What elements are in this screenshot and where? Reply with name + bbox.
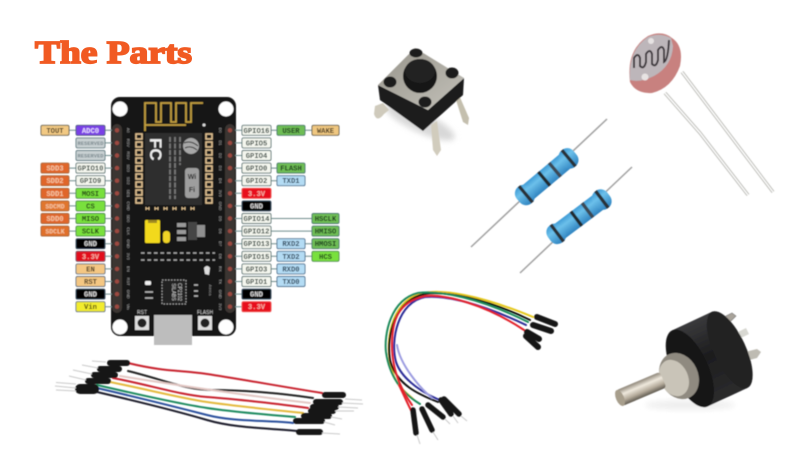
NodeMCU board: FC bbox=[146, 138, 165, 161]
right pin labels: GPIO2 bbox=[246, 178, 267, 186]
right pin labels: HMISO bbox=[315, 229, 337, 237]
left pin labels: SDD1 bbox=[46, 191, 64, 199]
icon: curved jumper wires bbox=[386, 292, 555, 444]
right pin labels: TXD0 bbox=[282, 279, 300, 287]
left pin header bbox=[112, 124, 122, 313]
right pin labels: GPIO15 bbox=[244, 254, 269, 262]
right pin labels bbox=[242, 125, 339, 312]
right silkscreen pin names: D3 bbox=[218, 166, 223, 171]
USB serial chip: CP2102 bbox=[176, 283, 182, 301]
left silkscreen pin names: A0 bbox=[126, 128, 131, 134]
left silkscreen pin names: 3V3 bbox=[126, 253, 131, 261]
RST button bbox=[135, 310, 149, 330]
right silkscreen pin names: GND bbox=[218, 290, 223, 299]
left pin labels: RST bbox=[84, 279, 98, 287]
right silkscreen pin names: D7 bbox=[218, 241, 223, 247]
icon: resistors bbox=[471, 119, 632, 273]
left pin labels: GND bbox=[84, 292, 98, 300]
left silkscreen pin names: CLK bbox=[126, 227, 131, 235]
right silkscreen pin names: D6 bbox=[218, 229, 223, 234]
right pin labels: HMOSI bbox=[315, 241, 336, 249]
right pin labels: GPIO13 bbox=[244, 241, 269, 249]
FLASH button bbox=[197, 310, 213, 330]
left pin labels: SDCLK bbox=[45, 229, 65, 236]
right silkscreen pin names bbox=[218, 128, 223, 311]
left silkscreen pin names: RST bbox=[126, 278, 131, 286]
right pin labels: GPIO4 bbox=[246, 153, 268, 161]
FLASH button: FLASH bbox=[197, 310, 213, 316]
right pin labels: HCS bbox=[319, 254, 333, 262]
left pin labels: 3.3V bbox=[82, 254, 100, 262]
icon: tactile push button bbox=[374, 48, 469, 156]
right pin labels: GPIO14 bbox=[244, 216, 270, 224]
icon: straight jumper wires bbox=[55, 361, 363, 434]
right silkscreen pin names: D2 bbox=[218, 153, 223, 159]
left pin labels: SDCMD bbox=[45, 203, 65, 210]
right pin labels: GPIO3 bbox=[246, 266, 267, 274]
title: The Parts bbox=[35, 34, 192, 70]
right pin labels: GPIO0 bbox=[246, 166, 267, 174]
left pin labels: SDD0 bbox=[46, 216, 64, 224]
right pin header bbox=[225, 124, 235, 313]
right pin labels: FLASH bbox=[280, 166, 302, 174]
left pin labels: GPIO9 bbox=[80, 178, 101, 186]
RST button: RST bbox=[137, 310, 147, 316]
left pin labels: SCLK bbox=[82, 229, 100, 237]
left pin labels: SDD2 bbox=[46, 178, 64, 186]
left pin labels: TOUT bbox=[46, 128, 64, 136]
left pin labels: EN bbox=[86, 266, 95, 274]
NodeMCU board: Amica bbox=[208, 284, 213, 296]
right pin labels: WAKE bbox=[317, 128, 335, 136]
left silkscreen pin names: SD2 bbox=[126, 177, 131, 185]
left silkscreen pin names: EN bbox=[126, 266, 131, 272]
left pin labels: SDD3 bbox=[46, 166, 64, 174]
left silkscreen pin names bbox=[126, 128, 131, 310]
right pin labels: GND bbox=[250, 292, 264, 300]
left pin labels: RESERVED bbox=[78, 154, 104, 160]
metal nut and bushing bbox=[652, 346, 706, 406]
right pin labels: GND bbox=[250, 203, 264, 211]
left pin labels: MISO bbox=[82, 216, 100, 224]
right pin labels: RXD2 bbox=[282, 241, 300, 249]
right silkscreen pin names: D0 bbox=[218, 128, 223, 134]
left silkscreen pin names: SD1 bbox=[126, 189, 131, 198]
USB serial chip bbox=[162, 280, 186, 304]
NodeMCU board bbox=[111, 97, 236, 345]
right silkscreen pin names: RX bbox=[218, 266, 223, 272]
icon: potentiometer bbox=[613, 305, 762, 414]
left pin labels: GPIO10 bbox=[78, 166, 103, 174]
USB serial chip: SILABS bbox=[170, 283, 176, 301]
right pin labels: GPIO12 bbox=[244, 229, 269, 237]
icon: photoresistor bbox=[629, 33, 773, 195]
left silkscreen pin names: RSV bbox=[126, 151, 131, 160]
right silkscreen pin names: D1 bbox=[218, 140, 223, 146]
left pin labels bbox=[41, 125, 105, 312]
resistor 1 bbox=[471, 119, 607, 247]
right pin labels: GPIO16 bbox=[244, 128, 269, 136]
USB connector bbox=[154, 315, 192, 345]
right silkscreen pin names: GND bbox=[218, 201, 223, 210]
right pin labels: GPIO1 bbox=[246, 279, 268, 287]
right pin labels: 3.3V bbox=[248, 304, 266, 312]
right pin labels: HSCLK bbox=[315, 216, 337, 224]
right pin labels: 3.3V bbox=[248, 191, 266, 199]
connector lines bbox=[41, 130, 339, 307]
left pin labels: Vin bbox=[84, 304, 97, 312]
left silkscreen pin names: Vin bbox=[126, 304, 131, 310]
left pin labels: ADC0 bbox=[82, 128, 99, 136]
right pin labels: GPIO5 bbox=[246, 140, 267, 148]
NodeMCU board: Fi bbox=[189, 187, 195, 194]
left silkscreen pin names: GND bbox=[126, 239, 131, 248]
resistor 2 bbox=[520, 167, 632, 273]
left silkscreen pin names: SD0 bbox=[126, 215, 131, 223]
right silkscreen pin names: D4 bbox=[218, 178, 223, 184]
right pin labels: USER bbox=[282, 128, 300, 136]
left pin labels: RESERVED bbox=[78, 141, 104, 147]
right pin labels: RXD0 bbox=[282, 266, 300, 274]
left pin labels: MOSI bbox=[82, 191, 99, 199]
left silkscreen pin names: GND bbox=[126, 290, 131, 299]
NodeMCU board: Wi bbox=[188, 174, 196, 181]
left pin labels: GND bbox=[84, 241, 98, 249]
left silkscreen pin names: RSV bbox=[126, 139, 131, 147]
metal shaft bbox=[616, 372, 666, 406]
left pin labels: CS bbox=[86, 203, 95, 211]
left silkscreen pin names: CMD bbox=[126, 201, 131, 211]
right pin labels: TXD1 bbox=[282, 178, 300, 186]
right silkscreen pin names: 3V3 bbox=[218, 190, 223, 198]
yellow capacitors bbox=[145, 220, 170, 243]
right silkscreen pin names: D8 bbox=[218, 254, 223, 260]
right silkscreen pin names: D5 bbox=[218, 216, 223, 222]
NodeMCU pinout diagram bbox=[41, 97, 339, 345]
left silkscreen pin names: SD3 bbox=[126, 164, 131, 173]
right pin labels: TXD2 bbox=[282, 254, 300, 262]
right silkscreen pin names: TX bbox=[218, 279, 223, 284]
right silkscreen pin names: 3V3 bbox=[218, 303, 223, 311]
